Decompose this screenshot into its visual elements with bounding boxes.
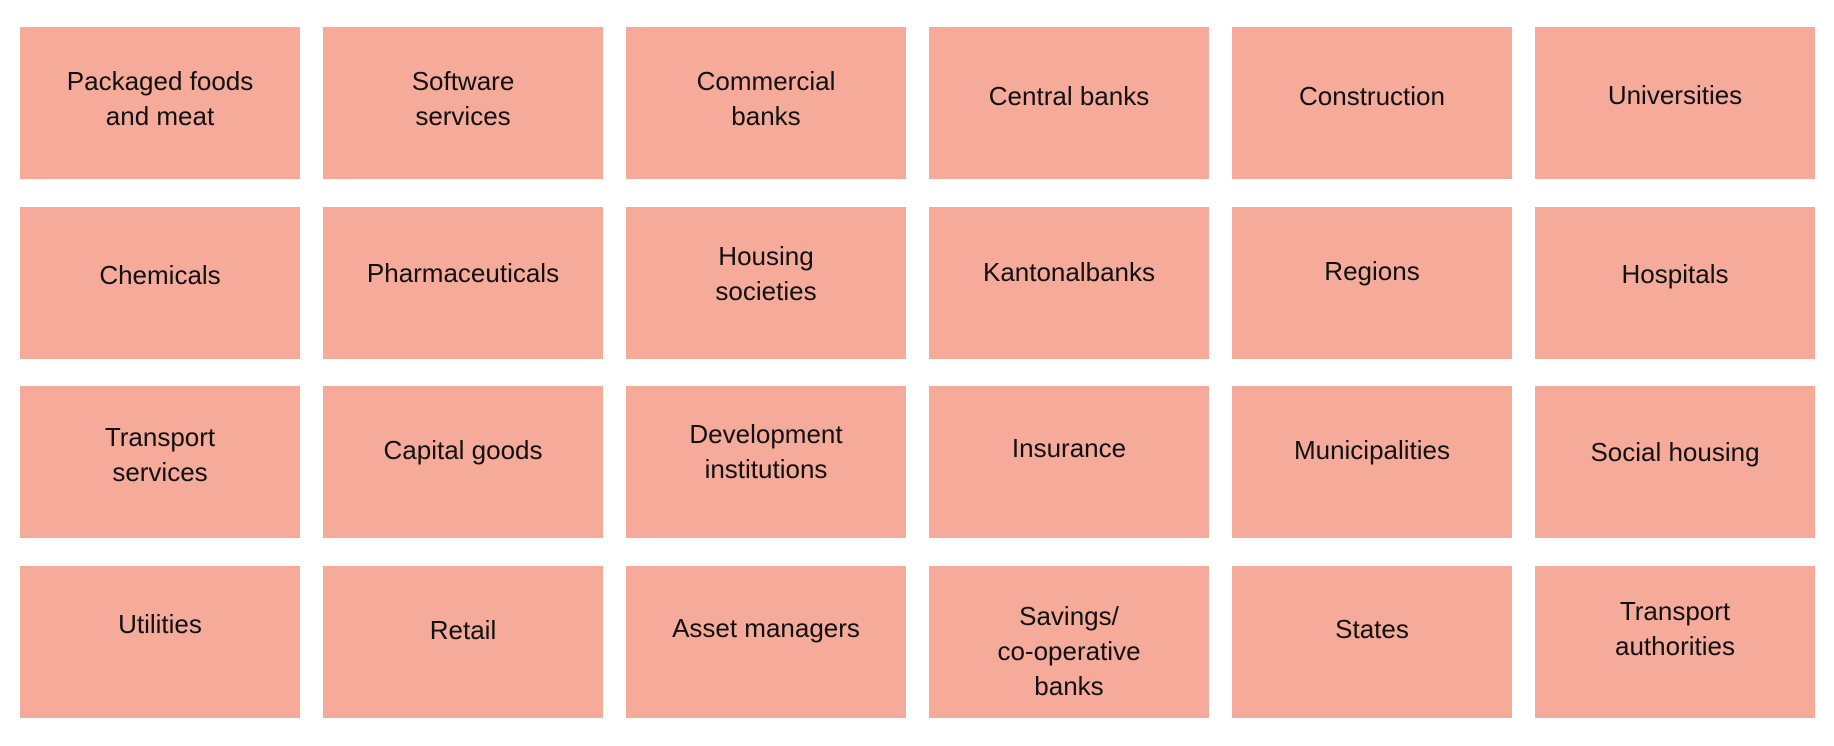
box: Asset managers: Asset managers — [672, 612, 860, 642]
box: Retail — [323, 566, 603, 718]
box: Software services: Software — [412, 66, 514, 96]
box: Development institutions — [626, 386, 906, 538]
box: Insurance — [929, 386, 1209, 538]
box: Commercial banks: Commercial — [697, 66, 835, 96]
box: Universities: Universities — [1608, 80, 1742, 110]
box: Social housing — [1535, 386, 1815, 538]
box: Central banks: Central banks — [989, 81, 1149, 111]
box: States: States — [1335, 614, 1409, 644]
box: Chemicals: Chemicals — [99, 260, 221, 290]
box: Packaged foods and meat: Packaged foods — [67, 66, 253, 96]
box: Utilities — [20, 566, 300, 718]
box: Insurance: Insurance — [1012, 432, 1126, 462]
box: Retail: Retail — [430, 614, 496, 644]
box: Social housing: Social housing — [1590, 436, 1760, 466]
box: Construction: Construction — [1299, 81, 1445, 111]
box: Savings/co-operative banks: Savings/ — [1019, 600, 1119, 630]
box: Chemicals — [20, 207, 300, 359]
box: Transport authorities: authorities — [1615, 631, 1735, 661]
box: Transport authorities — [1535, 566, 1815, 718]
box: Housing societies: societies — [715, 276, 817, 306]
box: Capital goods: Capital goods — [384, 434, 542, 464]
box: Packaged foods and meat — [20, 27, 300, 179]
box: Utilities: Utilities — [118, 608, 202, 638]
box: Municipalities: Municipalities — [1294, 434, 1450, 464]
box: Software services — [323, 27, 603, 179]
box: Packaged foods and meat: and meat — [106, 101, 214, 131]
box: Universities — [1535, 27, 1815, 179]
box: Capital goods — [323, 386, 603, 538]
box: Transport services — [20, 386, 300, 538]
box: Development institutions: Development — [689, 419, 843, 449]
box: Pharmaceuticals — [323, 207, 603, 359]
box: Regions — [1232, 207, 1512, 359]
box: Pharmaceuticals: Pharmaceuticals — [367, 258, 559, 288]
box: Kantonalbanks — [929, 207, 1209, 359]
box: Kantonalbanks: Kantonalbanks — [983, 256, 1155, 286]
box: Transport authorities: Transport — [1620, 596, 1730, 626]
box: Hospitals — [1535, 207, 1815, 359]
box: Construction — [1232, 27, 1512, 179]
box: Housing societies: Housing — [718, 241, 814, 271]
box: Asset managers — [626, 566, 906, 718]
box: Hospitals: Hospitals — [1622, 258, 1728, 288]
box: Transport services: services — [112, 457, 208, 487]
box: Development institutions: institutions — [705, 454, 827, 484]
box: Housing societies — [626, 207, 906, 359]
box: Central banks — [929, 27, 1209, 179]
box: Savings/co-operative banks: banks — [1034, 670, 1104, 700]
box: Transport services: Transport — [105, 422, 215, 452]
box: Municipalities — [1232, 386, 1512, 538]
box: Commercial banks — [626, 27, 906, 179]
box: Commercial banks: banks — [731, 101, 801, 131]
box: States — [1232, 566, 1512, 718]
box: Savings/co-operative banks: co-operative — [997, 636, 1141, 666]
box: Software services: services — [415, 101, 511, 131]
box: Savings/co-operative banks — [929, 566, 1209, 718]
box: Regions: Regions — [1324, 256, 1420, 286]
